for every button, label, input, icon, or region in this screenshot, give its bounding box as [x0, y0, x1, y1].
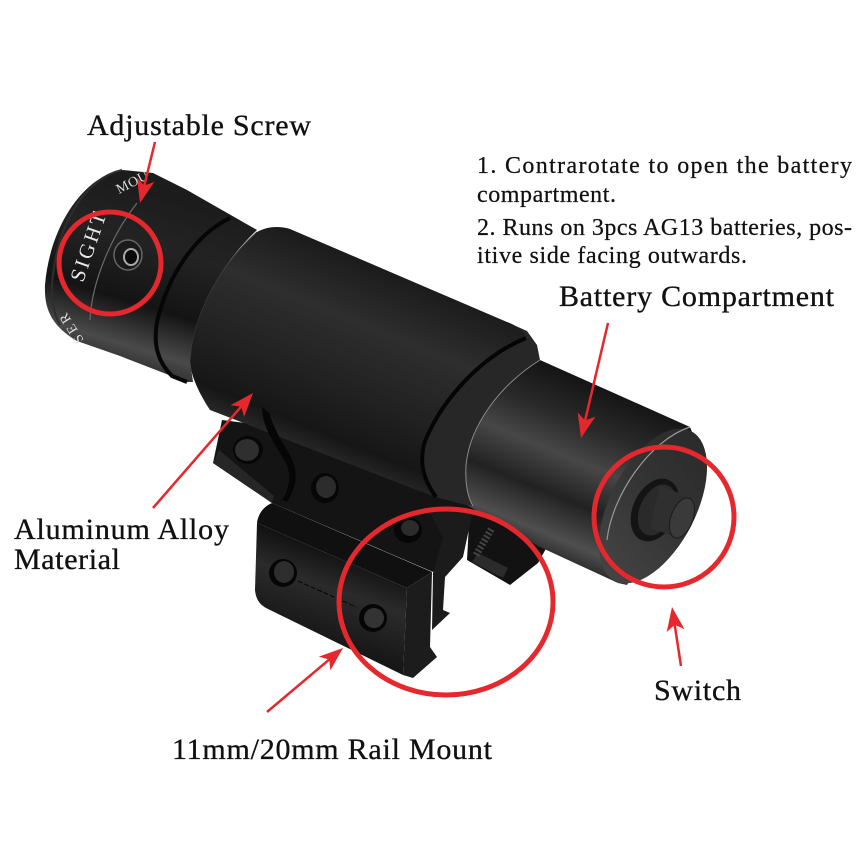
cap engraved text: MOU — [114, 169, 151, 198]
cap engraved text: SIGHT — [65, 209, 111, 285]
text block: battery instructions: itive side facing outwards. — [477, 243, 747, 269]
front tube and cap — [45, 170, 257, 382]
laser sight device photo — [45, 169, 729, 678]
text block: battery instructions — [477, 153, 852, 269]
text block: battery instructions: 2. Runs on 3pcs AG13 batteries, pos- — [477, 215, 852, 241]
label: switch: Switch — [654, 674, 741, 707]
text block: battery instructions: compartment. — [477, 182, 616, 208]
label: battery compartment: Battery Compartment — [559, 280, 835, 313]
label: aluminum alloy material: Aluminum Alloy — [14, 513, 229, 546]
label: rail mount: 11mm/20mm Rail Mount — [172, 733, 493, 766]
rear end face — [577, 412, 729, 600]
main body tube — [190, 227, 526, 497]
collar ring — [405, 322, 540, 506]
adjustment screw — [114, 240, 142, 270]
text block: battery instructions: 1. Contrarotate to open the battery — [477, 153, 852, 179]
arrow: switch — [667, 607, 684, 666]
label: aluminum alloy material — [14, 513, 229, 576]
arrow: battery compartment — [578, 323, 608, 438]
clip slot — [262, 407, 296, 502]
rear rail mount — [467, 505, 548, 585]
label: adjustable screw: Adjustable Screw — [87, 109, 311, 142]
arrow: rail mount — [267, 648, 343, 712]
front rail block — [255, 503, 437, 678]
switch button — [650, 485, 700, 541]
callout circle: switch — [594, 447, 734, 587]
spring clip — [430, 511, 472, 630]
rear battery tube — [430, 340, 700, 585]
label: aluminum alloy material: Material — [14, 543, 120, 576]
callout circle: adjustable screw — [59, 212, 161, 314]
cap engraved text — [57, 169, 151, 346]
cap engraved text: SER — [57, 309, 87, 346]
arrow: adjustable screw — [137, 142, 155, 203]
arrow: aluminum alloy — [153, 393, 253, 508]
back bracket — [213, 420, 475, 572]
callout circle: rail mount — [339, 509, 553, 695]
bracket screws — [233, 436, 422, 543]
